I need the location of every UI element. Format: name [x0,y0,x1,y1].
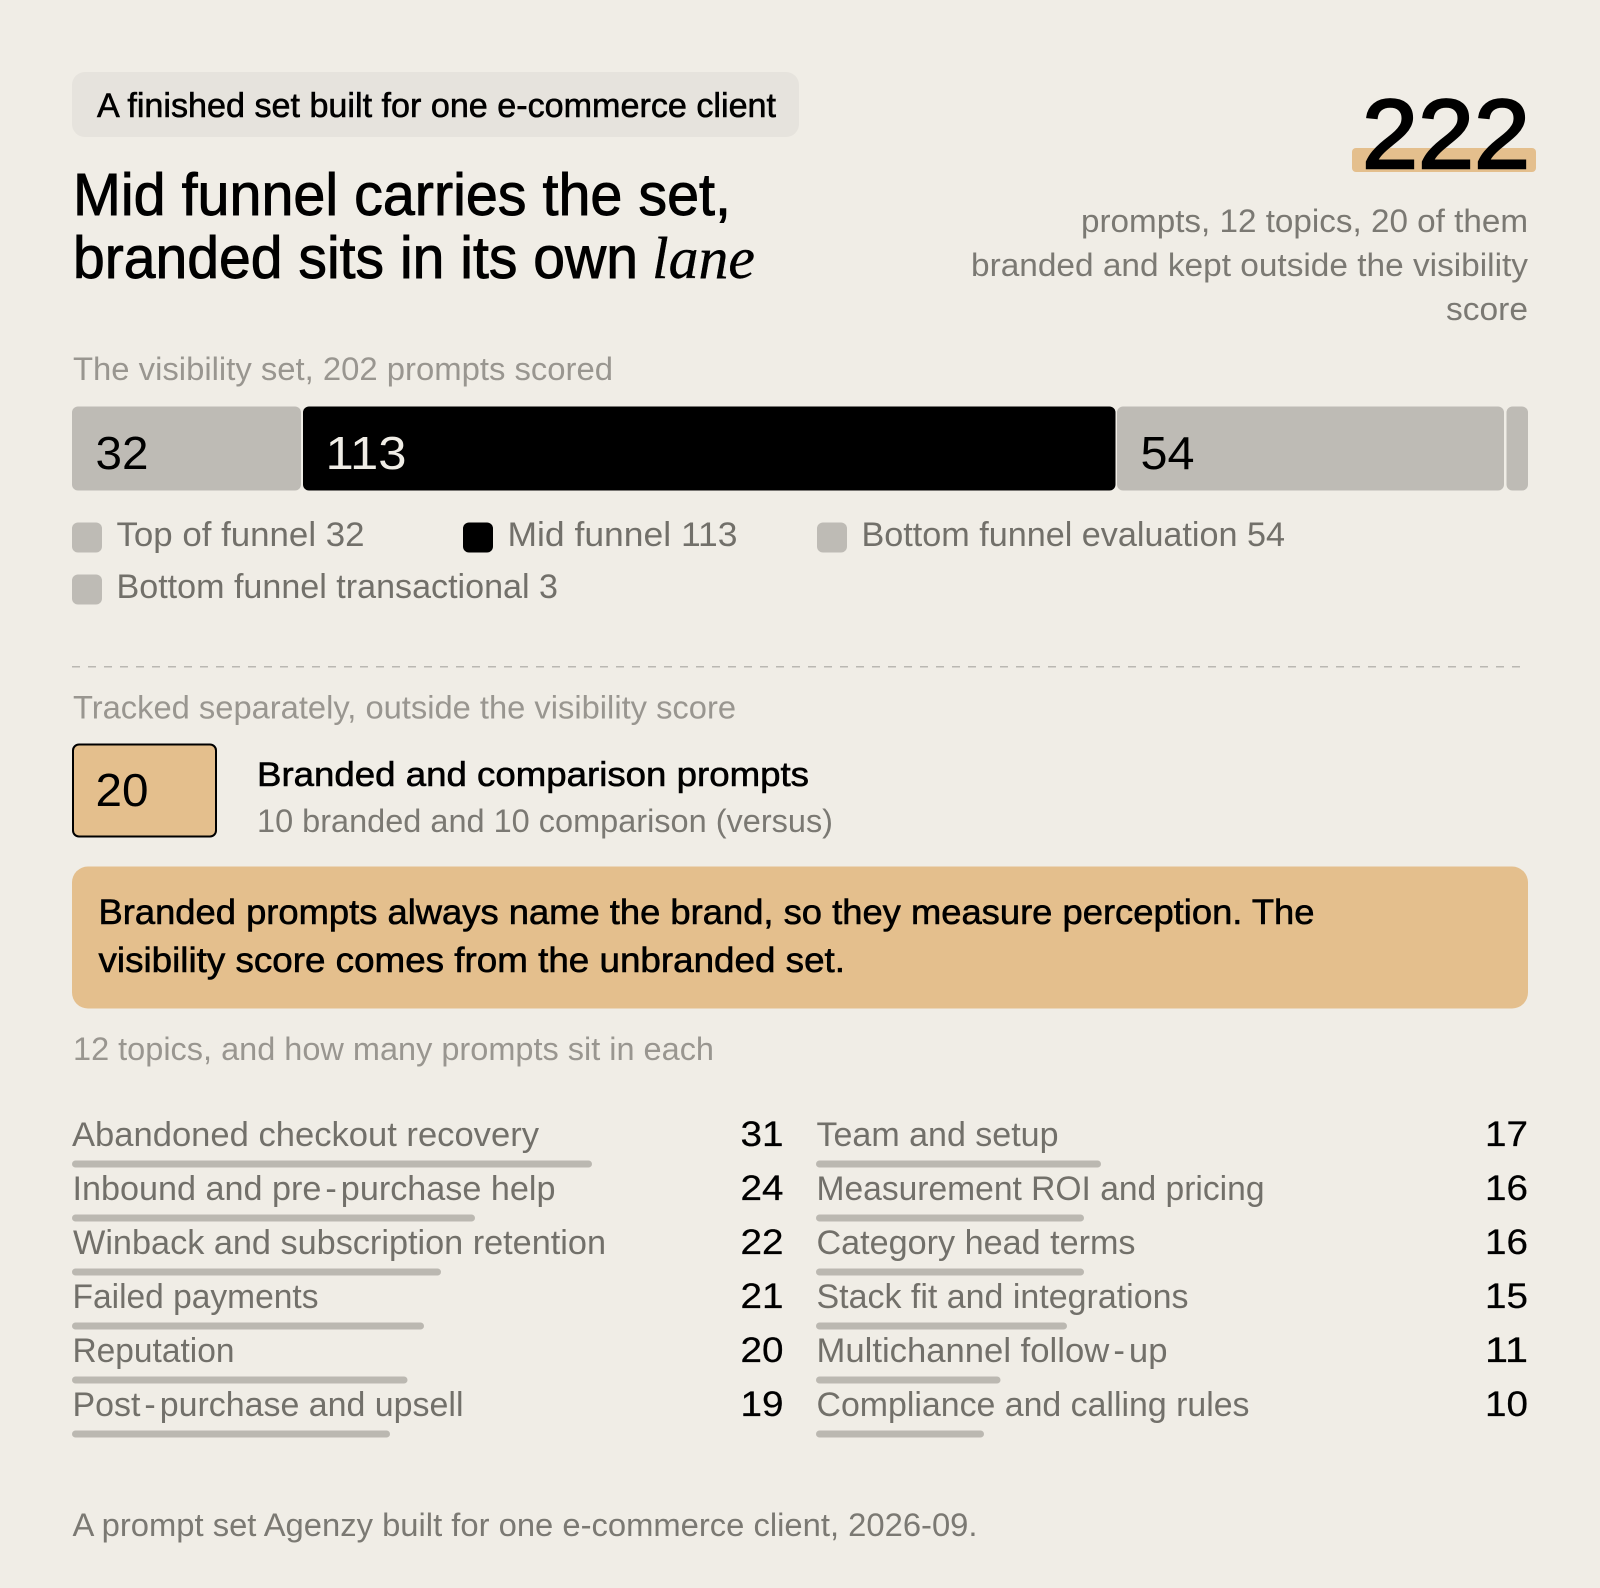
callout [72,866,1528,1008]
topic row: Abandoned checkout recovery [72,1114,784,1168]
segment: bottom funnel evaluation: 54 [1140,427,1194,479]
branded description [257,756,833,839]
topic row: Category head terms: Category head terms [816,1224,1136,1262]
topic row: Compliance and calling rules [816,1384,1528,1438]
topic row: Measurement ROI and pricing: Measurement ROI and pricing [816,1170,1264,1208]
topic row: Abandoned checkout recovery: Abandoned checkout recovery [72,1116,539,1154]
branded count box [73,744,216,836]
eyebrow tag: A finished set built for one e-commerce client [97,87,777,125]
callout: Branded prompts always name the brand, so they measure perception. The [98,893,1314,932]
legend item: bottom funnel transactional: Bottom funnel transactional 3 [116,568,558,606]
topic row: Team and setup [816,1114,1528,1168]
segment: top of funnel [72,406,301,490]
topic row: Team and setup: Team and setup [816,1116,1058,1154]
segment: top of funnel: 32 [96,427,148,479]
summary text [971,203,1528,327]
legend item: bottom funnel evaluation: Bottom funnel evaluation 54 [862,516,1285,554]
topic row: Post-purchase and upsell: 19 [740,1384,784,1424]
legend item: mid funnel: Mid funnel 113 [508,516,738,554]
topic row: Measurement ROI and pricing: 16 [1485,1168,1528,1208]
topics list: left column [72,1114,784,1438]
topic row: Post-purchase and upsell [72,1384,784,1438]
topic row: Winback and subscription retention: Winback and subscription retention [73,1224,606,1262]
topic row: Category head terms [816,1222,1528,1276]
topic row: Stack fit and integrations: 15 [1485,1276,1528,1316]
topic row: Inbound and pre-purchase help: 24 [740,1168,784,1208]
legend [72,516,1285,606]
topic row: Multichannel follow-up: Multichannel follow -up [816,1332,1168,1370]
footer note: A prompt set Agenzy built for one e-commerce client, 2026-09. [72,1507,978,1543]
topics list: right column [816,1114,1528,1438]
topic row: Abandoned checkout recovery: 31 [740,1114,784,1154]
topic row: Compliance and calling rules: Compliance and calling rules [816,1386,1250,1424]
topic row: Inbound and pre-purchase help [72,1168,784,1222]
topic row: Reputation [72,1330,784,1384]
topic row: Reputation: Reputation [72,1332,234,1370]
branded count box: 20 [96,764,148,816]
topic row: Measurement ROI and pricing [816,1168,1528,1222]
topic row: Inbound and pre-purchase help: Inbound and pre-purchase help [72,1170,556,1208]
legend item: top of funnel: Top of funnel 32 [116,516,364,554]
topic row: Multichannel follow-up [816,1330,1528,1384]
topic row: Winback and subscription retention [72,1222,784,1276]
topic row: Failed payments: Failed payments [72,1278,318,1316]
branded description: Branded and comparison prompts [257,756,809,794]
topic row: Post-purchase and upsell: Post-purchase and upsell [72,1386,464,1424]
summary text: prompts, 12 topics, 20 of them [1081,203,1528,239]
title: branded sits in its own [73,225,638,291]
topic row: Reputation: 20 [740,1330,784,1370]
segment: mid funnel [303,406,1116,490]
topic row: Winback and subscription retention: 22 [740,1222,784,1262]
stacked bar chart [72,406,1528,490]
summary text: score [1446,291,1528,327]
topic row: Failed payments: 21 [740,1276,784,1316]
title: lane [652,225,755,291]
topic row: Failed payments [72,1276,784,1330]
topic row: Team and setup: 17 [1485,1114,1528,1154]
topic row: Stack fit and integrations [816,1276,1528,1330]
callout: visibility score comes from the unbranded set. [98,941,845,980]
section label: visibility set: The visibility set, 202 prompts scored [73,351,613,387]
topic row: Compliance and calling rules: 10 [1485,1384,1528,1424]
section label: topics: 12 topics, and how many prompts sit in each [73,1031,714,1067]
topic row: Category head terms: 16 [1485,1222,1528,1262]
branded description: 10 branded and 10 comparison (versus) [257,803,833,839]
topic row: Multichannel follow-up: 11 [1485,1330,1528,1370]
big number 222: 222 [1362,79,1530,189]
segment: bottom funnel evaluation [1117,406,1504,490]
section label: tracked separately: Tracked separately, outside the visibility score [73,690,736,726]
eyebrow tag [72,72,799,137]
title [73,162,755,291]
summary text: branded and kept outside the visibility [971,247,1528,283]
segment: mid funnel: 113 [326,427,406,479]
title: Mid funnel carries the set, [73,162,731,228]
segment: bottom funnel transactional [1506,406,1528,490]
topic row: Stack fit and integrations: Stack fit and integrations [816,1278,1188,1316]
